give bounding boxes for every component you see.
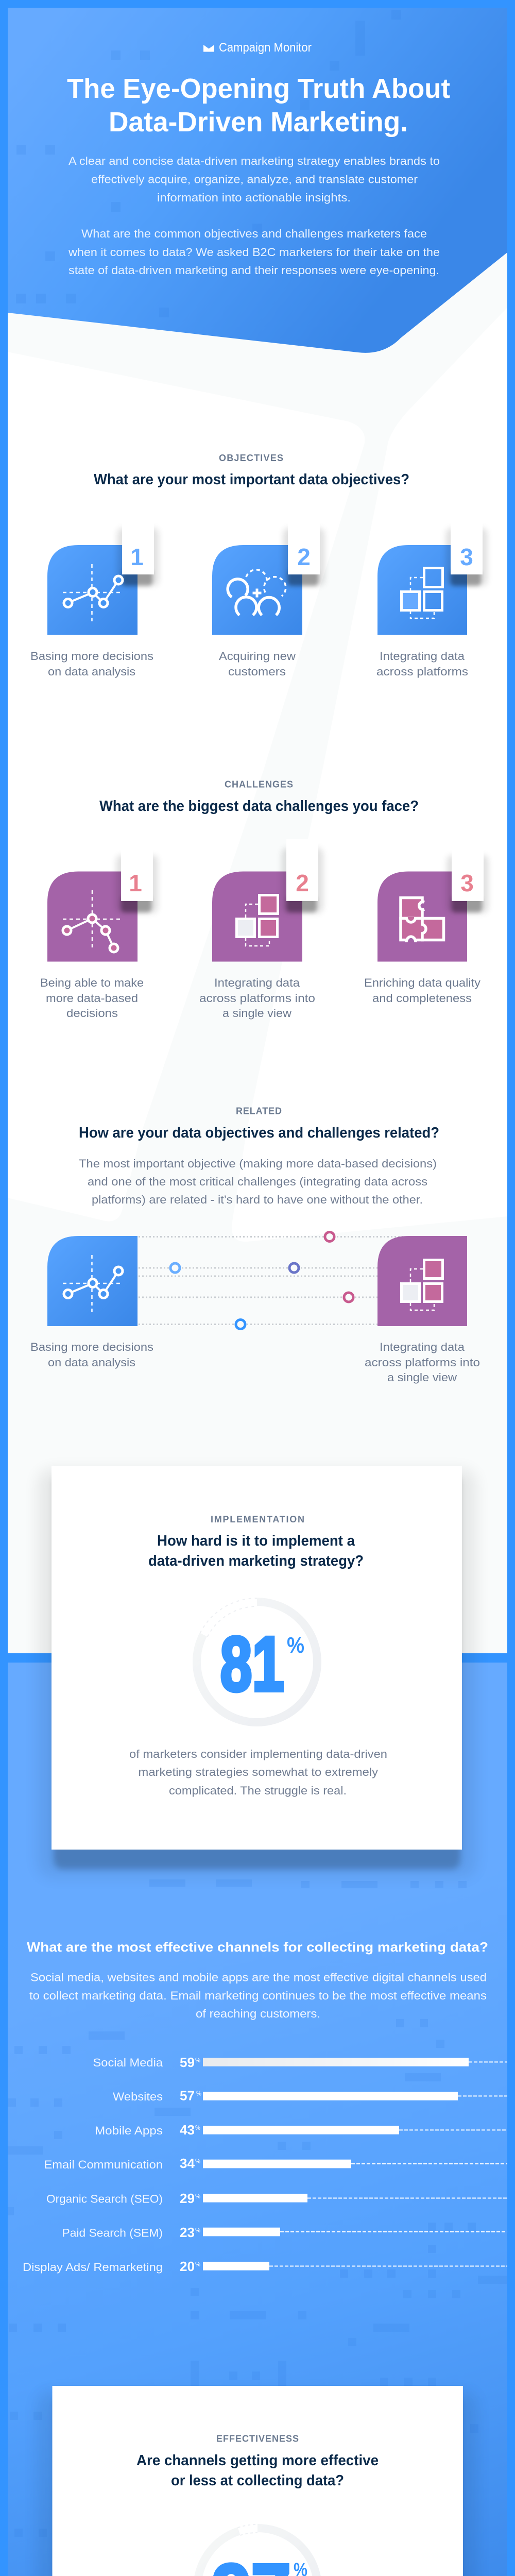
- row: Paid Search 23%: [62, 2225, 507, 2240]
- icon: puzzle: [401, 897, 444, 942]
- intro text: A clear and concise data-driven marketing strategy enables brands to: [68, 155, 440, 167]
- row: Display Ads 20%: Display Ads/ Remarketing: [23, 2261, 163, 2274]
- challenge 1 label: decisions: [66, 1007, 118, 1020]
- row: Organic Search 29%: 29: [180, 2191, 195, 2206]
- challenge 1 label: Being able to make: [40, 976, 144, 989]
- row: Social Media 59%: [93, 2055, 507, 2070]
- row: Websites 57%: [113, 2088, 507, 2104]
- row: Websites 57%: Websites: [113, 2090, 163, 2103]
- section tag: IMPLEMENTATION: [211, 1514, 304, 1524]
- row: Email Communication 34%: 34: [180, 2156, 195, 2171]
- challenge 3 label: Enriching data quality: [364, 976, 480, 989]
- objective 2 tile: [212, 515, 324, 635]
- title: Data-Driven Marketing.: [109, 107, 408, 138]
- row: Mobile Apps 43%: 43: [180, 2122, 195, 2138]
- intro text: [68, 155, 440, 277]
- row: Websites 57%: %: [196, 2090, 201, 2097]
- panel: implementation card: [37, 1466, 477, 1878]
- row: Social Media 59%: %: [195, 2056, 200, 2064]
- intro text: state of data-driven marketing and their responses were eye-opening.: [68, 264, 439, 277]
- challenge 3 label: [364, 976, 480, 1005]
- objective 3 tile: [377, 515, 487, 635]
- challenge 2 tile: [212, 839, 323, 961]
- paragraph: The most important objective (making more data-based decisions): [79, 1157, 437, 1170]
- objective 1 label: [30, 650, 153, 678]
- challenge 1 label: [40, 976, 144, 1020]
- heading: How are your data objectives and challenges related?: [79, 1125, 439, 1141]
- section tag: EFFECTIVENESS: [216, 2434, 299, 2444]
- paragraph: and one of the most critical challenges (integrating data across: [88, 1175, 427, 1188]
- panel: related: [30, 1106, 480, 1384]
- objective 2 label: Acquiring new: [219, 650, 296, 663]
- challenge 3 tile: 3: [460, 870, 474, 896]
- challenge 1 label: more data-based: [46, 992, 138, 1005]
- background diagonal road shape: [8, 206, 507, 1653]
- left label: [30, 1341, 153, 1369]
- donut chart 97%: [197, 2524, 318, 2576]
- paragraph: of reaching customers.: [196, 2007, 320, 2020]
- connector rings: [170, 1232, 353, 1329]
- lower blue band: [8, 1653, 507, 1663]
- paragraph: [79, 1157, 437, 1206]
- heading: How hard is it to implement a: [157, 1533, 355, 1549]
- row: Paid Search 23%: Paid Search (SEM): [62, 2227, 163, 2239]
- heading: What are the biggest data challenges you face?: [99, 798, 419, 815]
- challenge 1 tile: 1: [129, 870, 142, 896]
- objective 1 label: on data analysis: [48, 665, 135, 678]
- right label: across platforms into: [365, 1356, 480, 1369]
- left label: Basing more decisions: [30, 1341, 153, 1353]
- panel: hero: [8, 8, 507, 353]
- objective 2 label: customers: [228, 665, 286, 678]
- paragraph: [129, 1748, 387, 1797]
- row: Organic Search 29%: [46, 2191, 507, 2206]
- row: Social Media 59%: Social Media: [93, 2056, 163, 2069]
- left label: on data analysis: [48, 1356, 135, 1369]
- row: Mobile Apps 43%: Mobile Apps: [95, 2124, 163, 2137]
- objective 1 tile: 1: [130, 544, 144, 570]
- intro text: when it comes to data? We asked B2C marketers for their take on the: [68, 246, 440, 259]
- panel: channels background: [8, 1663, 507, 2576]
- heading: Are channels getting more effective: [136, 2452, 379, 2469]
- paragraph: Social media, websites and mobile apps are the most effective digital channels used: [30, 1971, 487, 1984]
- paragraph: platforms) are related - it’s hard to have one without the other.: [92, 1193, 423, 1206]
- challenge 2 label: [199, 976, 315, 1020]
- heading: or less at collecting data?: [171, 2472, 344, 2489]
- row: Websites 57%: 57: [180, 2088, 195, 2104]
- logo: Campaign Monitor: [219, 41, 312, 55]
- row: Display Ads 20%: 20: [180, 2259, 195, 2274]
- row: Mobile Apps 43%: [95, 2122, 507, 2138]
- right label: Integrating data: [380, 1341, 465, 1353]
- donut chart 81%: 81: [220, 1621, 284, 1707]
- objective 3 label: [376, 650, 468, 678]
- right label: [365, 1341, 480, 1384]
- hero gradient background: [8, 8, 507, 353]
- bar chart: [23, 2055, 507, 2274]
- heading: What are the most effective channels for collecting marketing data?: [27, 1939, 488, 1955]
- intro text: What are the common objectives and challenges marketers face: [81, 227, 427, 240]
- row: Email Communication 34%: [44, 2156, 507, 2171]
- challenge 1 tile: [47, 840, 158, 961]
- objective 1 label: Basing more decisions: [30, 650, 153, 663]
- row: Social Media 59%: 59: [180, 2055, 195, 2070]
- objective 3 label: Integrating data: [380, 650, 465, 663]
- section tag: OBJECTIVES: [219, 453, 283, 463]
- challenge 3 label: and completeness: [372, 992, 472, 1005]
- dotted connector lines: [139, 1236, 404, 1324]
- right tile: integrating platforms: [377, 1236, 467, 1326]
- row: Email Communication 34%: %: [195, 2157, 200, 2165]
- section tag: CHALLENGES: [225, 779, 293, 789]
- row: Paid Search 23%: %: [195, 2226, 200, 2234]
- panel: challenges: [40, 779, 488, 1020]
- objective 3 tile: 3: [460, 544, 473, 570]
- paragraph: of marketers consider implementing data-driven: [129, 1748, 387, 1760]
- heading: [148, 1533, 364, 1569]
- panel: effectiveness card: [36, 2386, 478, 2576]
- challenge 3 tile: [377, 840, 488, 961]
- row: Email Communication 34%: Email Communication: [44, 2158, 163, 2171]
- heading: data-driven marketing strategy?: [148, 1553, 364, 1569]
- paragraph: to collect marketing data. Email marketing continues to be the most effective means: [29, 1989, 487, 2002]
- intro text: effectively acquire, organize, analyze, and translate customer: [91, 173, 418, 185]
- row: Organic Search 29%: %: [195, 2192, 200, 2200]
- challenge 2 label: Integrating data: [214, 976, 300, 989]
- section tag: RELATED: [236, 1106, 282, 1116]
- panel: channels: [23, 1939, 507, 2274]
- objective 2 label: [219, 650, 296, 678]
- objective 3 label: across platforms: [376, 665, 468, 678]
- objective 2 tile: 2: [297, 544, 311, 570]
- title: [67, 73, 450, 138]
- objective 1 tile: [47, 515, 159, 635]
- paragraph: marketing strategies somewhat to extremely: [138, 1766, 378, 1778]
- left tile: data analysis: [47, 1236, 138, 1326]
- intro text: information into actionable insights.: [157, 191, 351, 204]
- paragraph: complicated. The struggle is real.: [169, 1784, 347, 1797]
- row: Display Ads 20%: [23, 2259, 507, 2274]
- row: Paid Search 23%: 23: [180, 2225, 195, 2240]
- row: Display Ads 20%: %: [195, 2260, 200, 2268]
- right label: a single view: [387, 1371, 457, 1384]
- challenge 2 label: a single view: [222, 1007, 291, 1020]
- panel: objectives: [30, 453, 487, 678]
- row: Organic Search 29%: Organic Search (SEO): [46, 2193, 163, 2205]
- challenge 2 label: across platforms into: [199, 992, 315, 1005]
- decorative pixel squares: [8, 1879, 507, 2537]
- heading: What are your most important data objectives?: [94, 471, 409, 488]
- donut chart 81%: %: [287, 1633, 304, 1658]
- row: Mobile Apps 43%: %: [195, 2124, 200, 2131]
- paragraph: [29, 1971, 487, 2020]
- heading: [136, 2452, 379, 2489]
- challenge 2 tile: 2: [296, 870, 309, 896]
- donut chart 81%: [197, 1598, 317, 1722]
- title: The Eye-Opening Truth About: [67, 73, 450, 104]
